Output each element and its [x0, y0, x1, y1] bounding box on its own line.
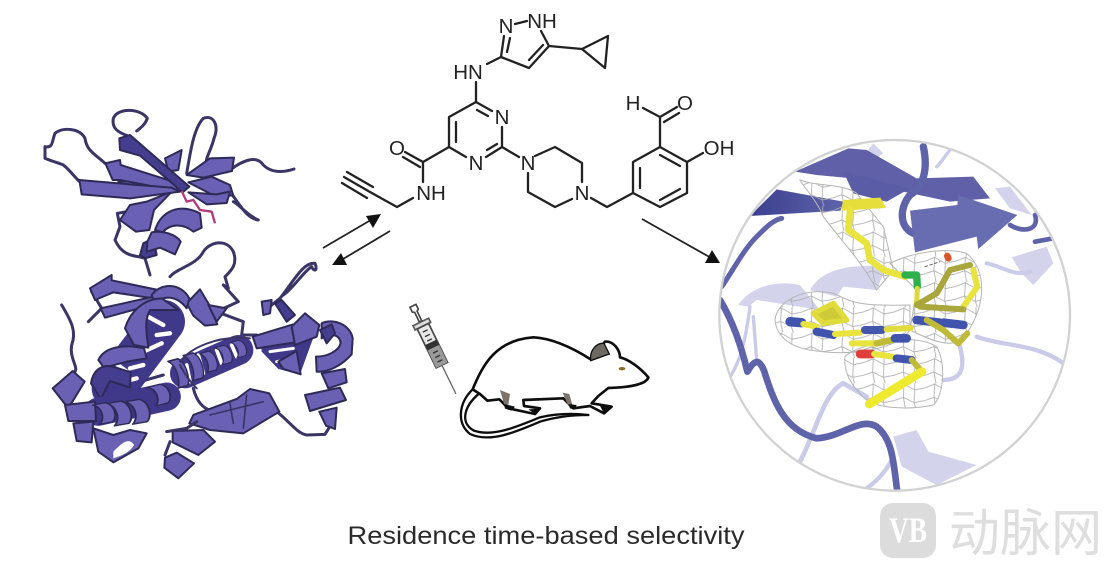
- atom labels: N: [495, 106, 509, 129]
- caption: Residence time-based selectivity: [348, 522, 745, 550]
- mouse tail: [461, 389, 588, 437]
- watermark logo: 动脉网: [949, 505, 1102, 562]
- atom labels: OH: [704, 137, 734, 160]
- syringe icon: [405, 302, 464, 398]
- atom labels: [389, 10, 734, 205]
- atom labels: N: [575, 182, 589, 205]
- central helix: [168, 338, 250, 389]
- watermark logo: [880, 503, 1102, 562]
- arrow: inhibitor dissociation: [332, 231, 390, 265]
- mouse paws: [504, 404, 612, 414]
- inhibitor sticks: [790, 198, 977, 404]
- protein loops: [45, 110, 335, 435]
- mouse icon: [461, 337, 648, 437]
- arrow: inhibitor binding to protein: [323, 214, 381, 248]
- right subdomain helices: [253, 300, 353, 429]
- ligand in hinge: [182, 191, 215, 223]
- atom labels: NH: [527, 10, 557, 33]
- upper lobe beta sheet: [79, 135, 234, 232]
- atom labels: O: [677, 92, 693, 115]
- dark protein strands: [720, 147, 1053, 492]
- atom labels: N: [469, 152, 483, 175]
- atom labels: HN: [453, 61, 483, 84]
- long helix: [91, 286, 189, 399]
- bottom helices: [164, 389, 279, 478]
- middle strands: [90, 275, 227, 326]
- atom labels: H: [626, 92, 640, 115]
- atom labels: O: [389, 137, 405, 160]
- circular inset: crystal structure with electron density: [719, 140, 1070, 492]
- pale background ribbons: [730, 143, 1063, 488]
- arrow: to crystal structure: [642, 219, 720, 263]
- mouse body: [473, 337, 648, 414]
- atom labels: N: [499, 15, 513, 38]
- mouse eye: [619, 367, 625, 370]
- chemical structure: [342, 10, 734, 207]
- lower left helices: [53, 371, 172, 462]
- inset contents: [720, 143, 1063, 492]
- atom labels: N: [521, 152, 535, 175]
- electron density mesh: [775, 180, 982, 408]
- inset circle border: [719, 140, 1070, 491]
- upper helix: [140, 209, 202, 258]
- watermark logo: VB: [889, 510, 927, 550]
- mouse ear: [591, 343, 609, 361]
- mouse fore foot: [563, 393, 573, 406]
- bonds: [342, 21, 703, 207]
- protein ribbon structure: [45, 110, 353, 478]
- atom labels: NH: [416, 182, 446, 205]
- mouse hind foot: [500, 390, 510, 405]
